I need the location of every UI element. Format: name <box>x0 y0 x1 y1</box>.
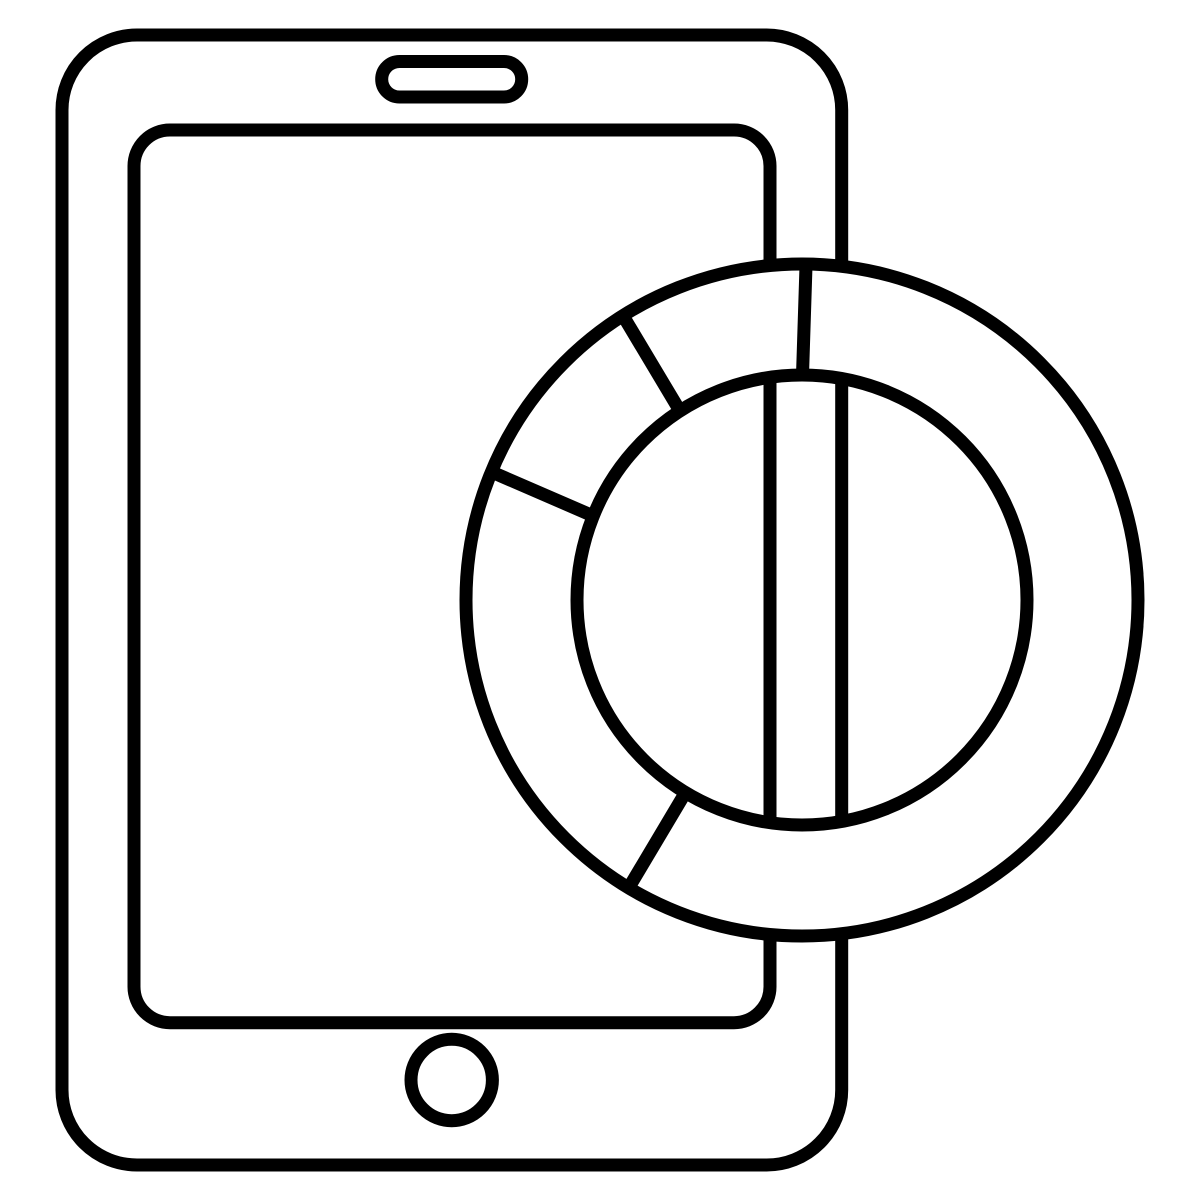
tablet home button <box>411 1039 492 1121</box>
tablet screen <box>134 130 770 1023</box>
donut inner ring <box>577 375 1027 825</box>
donut segment dividers <box>494 266 806 884</box>
inner circle vertical lines <box>770 380 842 820</box>
tablet body <box>62 35 842 1165</box>
donut outer ring <box>466 264 1138 936</box>
donut chart <box>466 264 1138 936</box>
tablet speaker <box>382 62 522 97</box>
